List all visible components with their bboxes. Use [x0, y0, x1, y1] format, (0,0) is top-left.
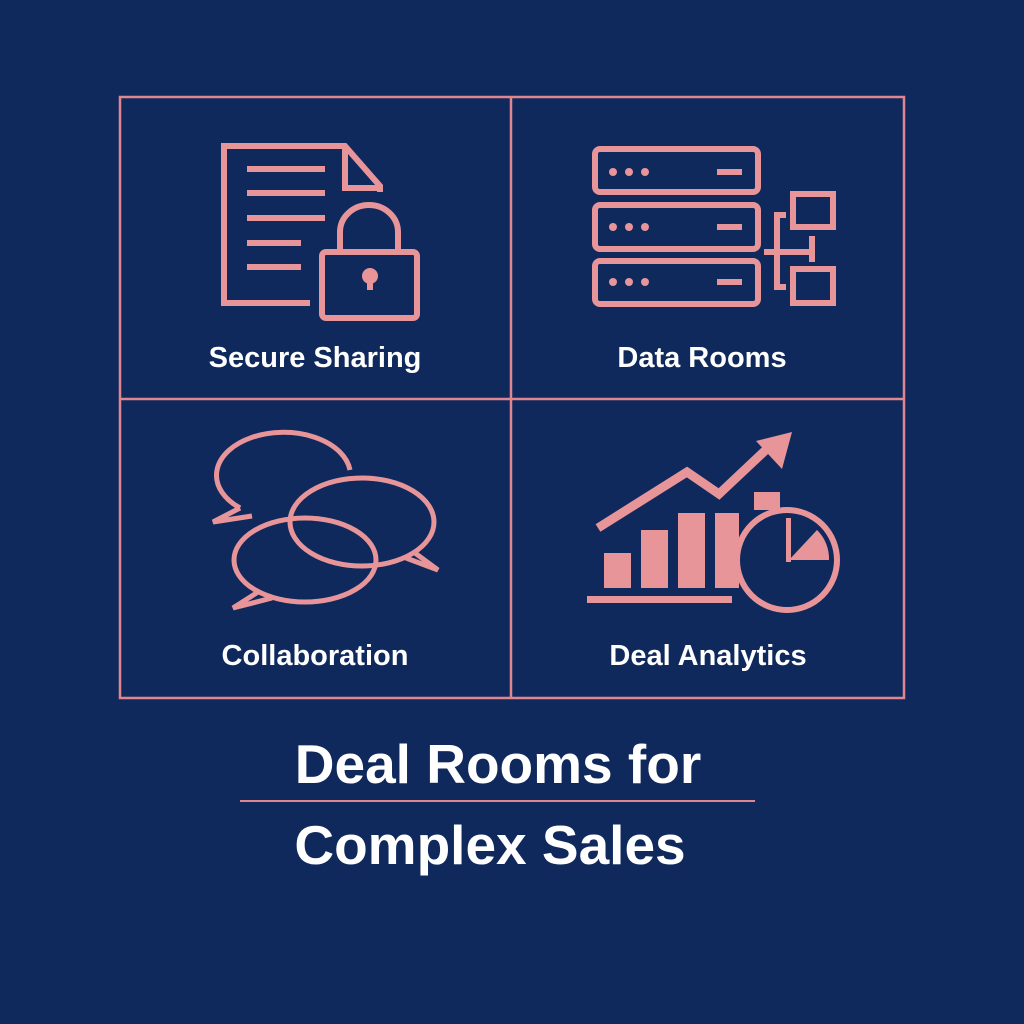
icon: chat bubbles — [213, 432, 438, 608]
title — [240, 733, 755, 876]
grid frame — [120, 97, 904, 698]
icon: server with hierarchy — [595, 149, 833, 304]
label: Deal Analytics: Deal Analytics — [609, 640, 807, 672]
icon: document with lock — [224, 146, 417, 318]
icon: analytics — [587, 432, 837, 610]
title: Deal Rooms for — [295, 733, 701, 795]
label: Collaboration: Collaboration — [222, 640, 408, 672]
label: Data Rooms: Data Rooms — [617, 342, 787, 374]
title: Complex Sales — [294, 814, 686, 876]
label: Secure Sharing: Secure Sharing — [209, 342, 421, 374]
